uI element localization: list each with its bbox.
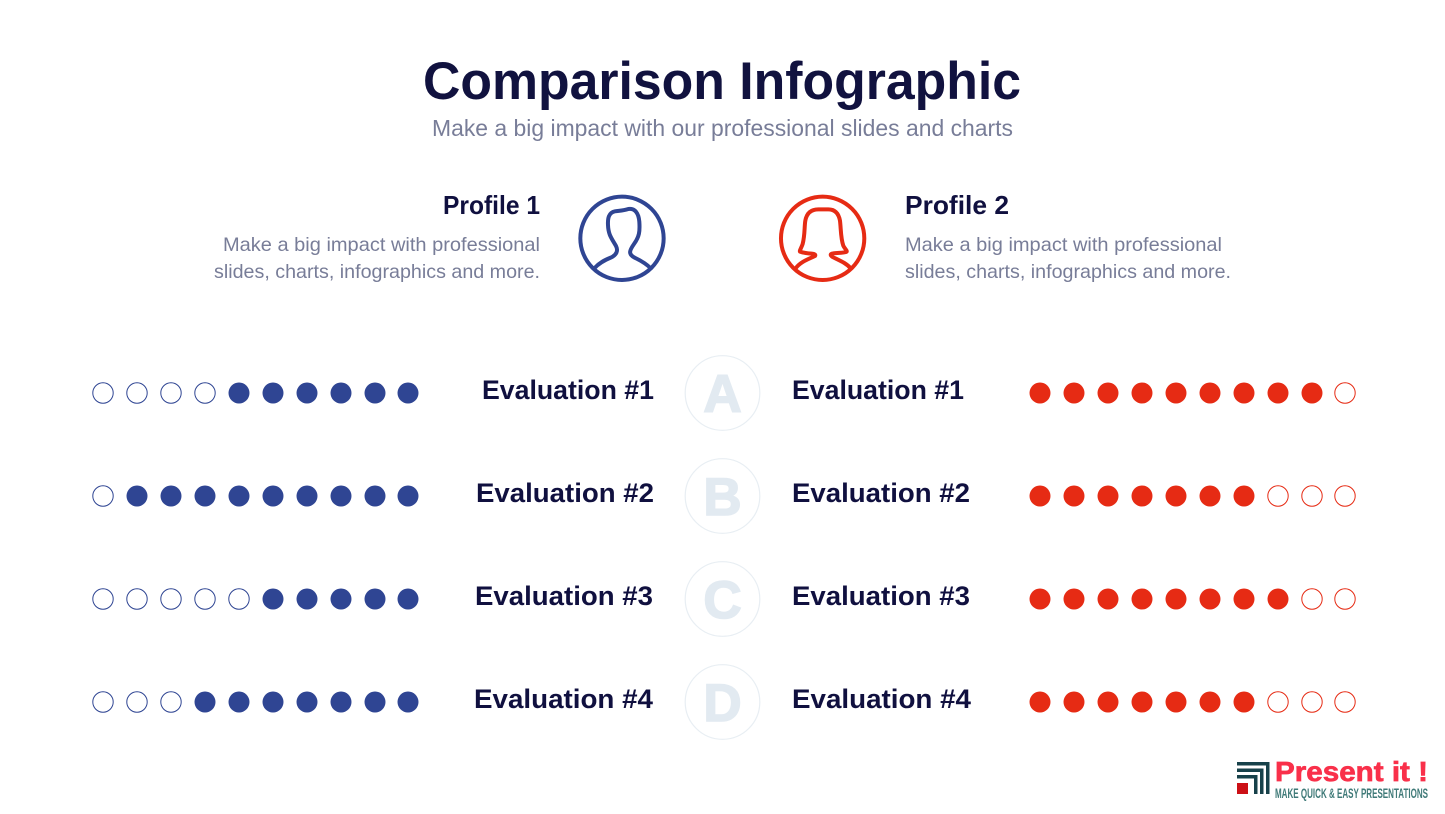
profile 1 description <box>214 234 540 283</box>
profile 1 description: slides, charts, infographics and more. <box>214 261 540 283</box>
right dots B: 7 of 10 <box>1030 486 1355 506</box>
title: Comparison Infographic <box>423 52 1021 111</box>
right label B: Evaluation #2 <box>792 478 970 508</box>
icon: logo mark <box>1237 762 1270 794</box>
row B <box>93 459 1355 533</box>
row D <box>93 665 1355 739</box>
right dots D: 7 of 10 <box>1030 692 1355 712</box>
icon: male avatar <box>580 197 664 280</box>
profile 2 description: slides, charts, infographics and more. <box>905 261 1231 283</box>
row C <box>93 562 1355 636</box>
left label B: Evaluation #2 <box>476 478 654 508</box>
profile 1 heading: Profile 1 <box>443 190 540 220</box>
left label C: Evaluation #3 <box>475 581 653 611</box>
badge C <box>685 562 760 636</box>
logo wordmark: Present it ! <box>1275 756 1428 787</box>
logo <box>1237 756 1428 801</box>
profile 2 heading: Profile 2 <box>905 190 1009 220</box>
profile 2 description: Make a big impact with professional <box>905 234 1222 256</box>
panel: profile 1 <box>214 190 664 283</box>
badge B: B <box>703 468 742 527</box>
badge C: C <box>703 571 742 630</box>
subtitle: Make a big impact with our professional slides and charts <box>432 115 1013 141</box>
badge D <box>685 665 760 739</box>
left dots B: 9 of 10 <box>93 486 419 506</box>
badge A <box>685 356 760 430</box>
left dots C: 5 of 10 <box>93 588 419 610</box>
icon: female avatar <box>781 197 864 280</box>
right dots C: 8 of 10 <box>1030 588 1355 610</box>
left dots A: 6 of 10 <box>93 382 419 404</box>
right label C: Evaluation #3 <box>792 581 970 611</box>
badge A: A <box>703 365 742 424</box>
left label D: Evaluation #4 <box>474 684 653 714</box>
right label D: Evaluation #4 <box>792 684 971 714</box>
right dots A: 9 of 10 <box>1030 382 1355 404</box>
badge D: D <box>703 674 742 733</box>
left dots D: 7 of 10 <box>93 692 419 712</box>
row A <box>93 356 1355 430</box>
right label A: Evaluation #1 <box>792 375 964 405</box>
panel: profile 2 <box>781 190 1231 283</box>
left label A: Evaluation #1 <box>482 375 654 405</box>
profile 2 description <box>905 234 1231 283</box>
profile 1 description: Make a big impact with professional <box>223 234 540 256</box>
badge B <box>685 459 760 533</box>
